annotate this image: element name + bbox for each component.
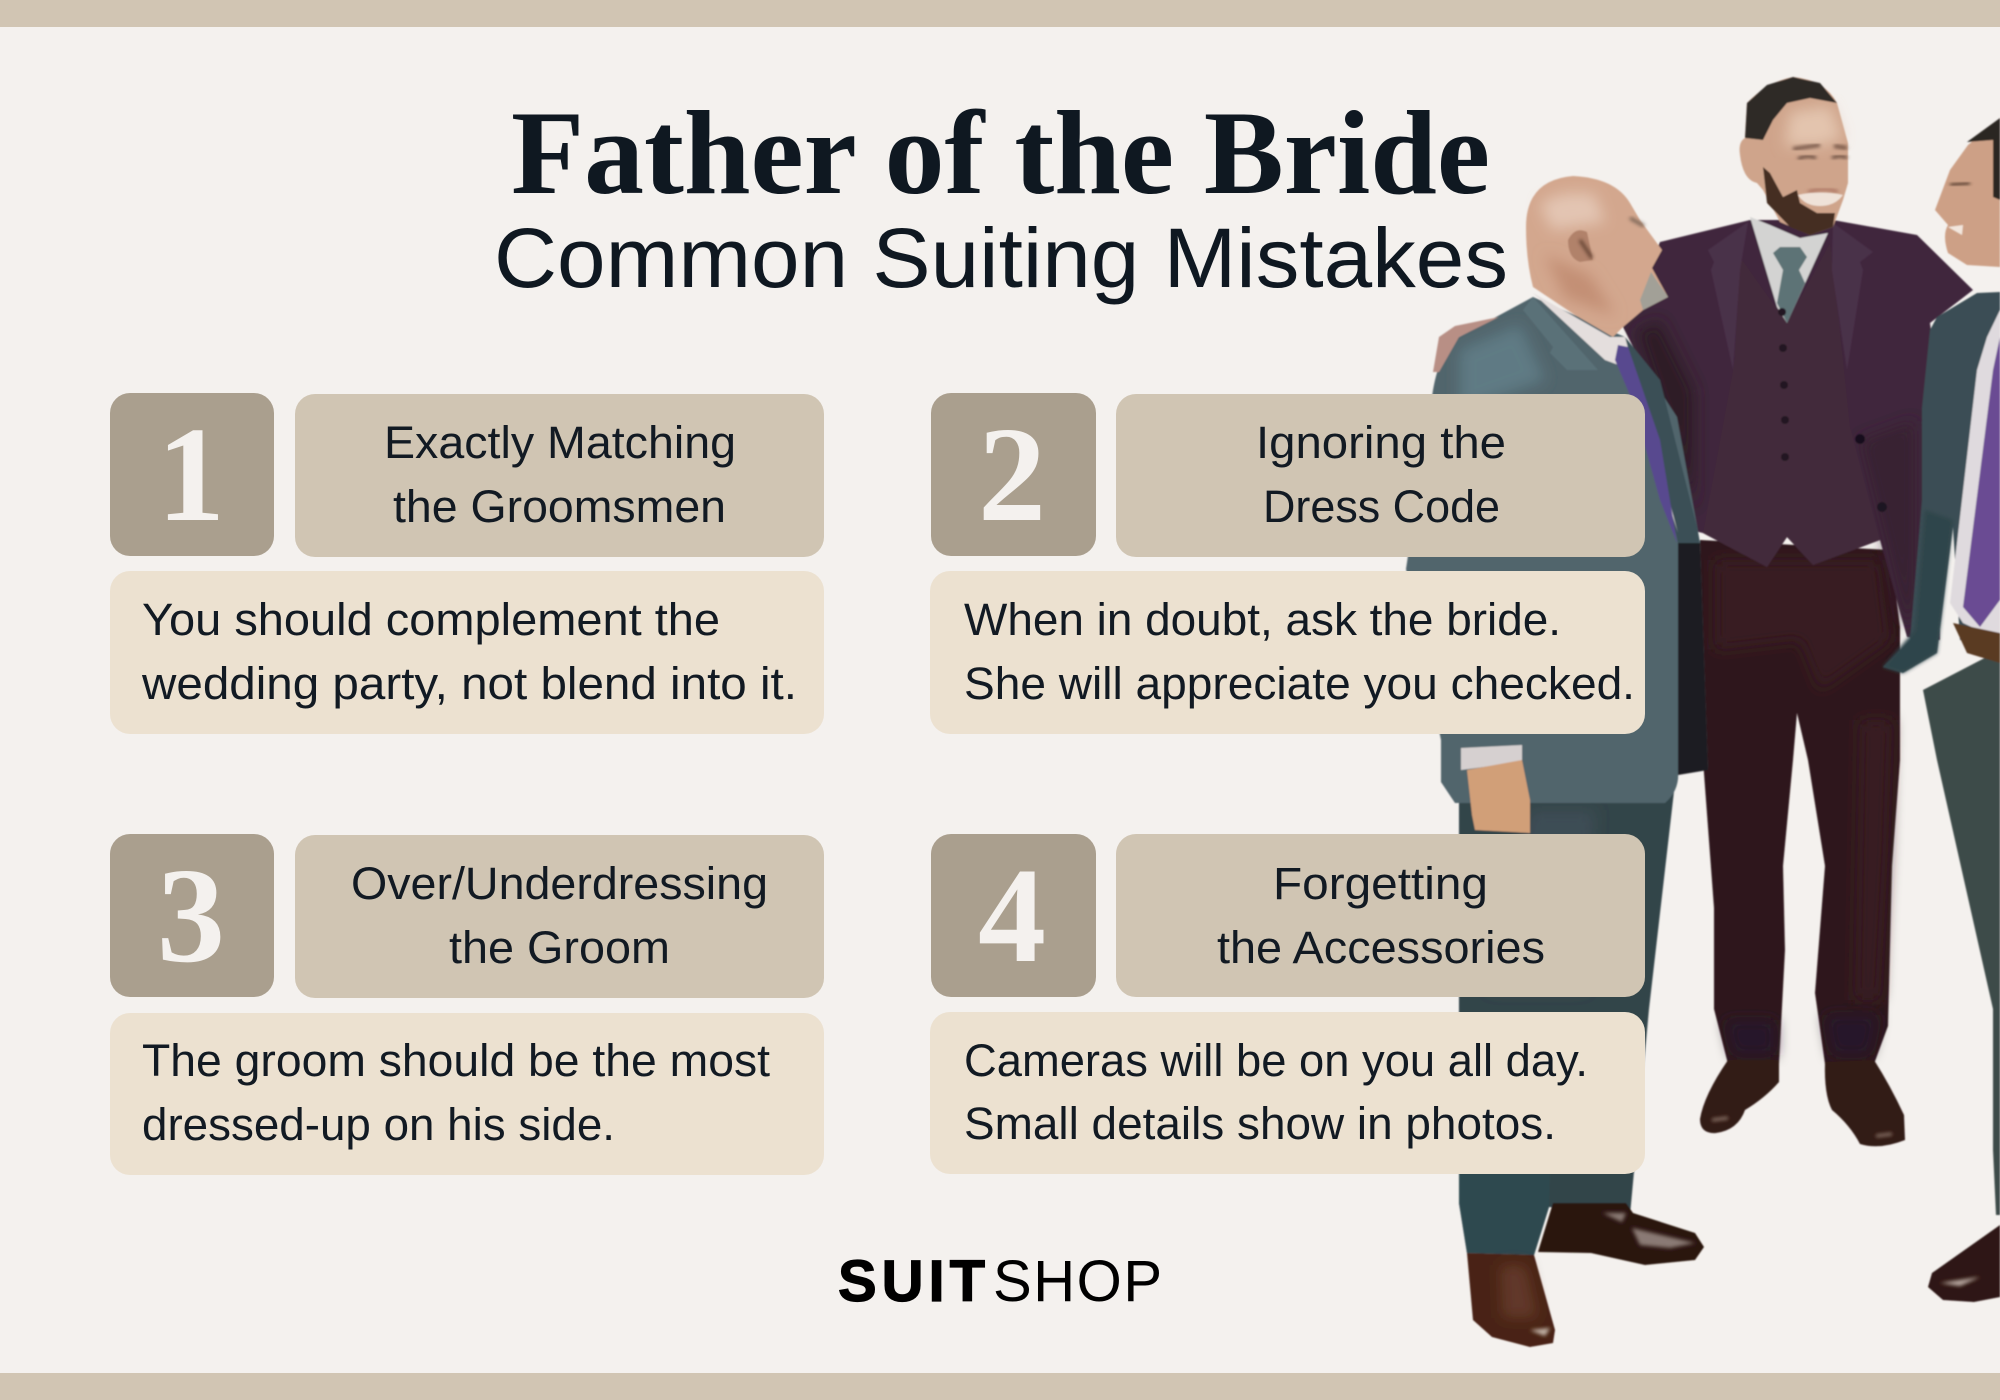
heading 3: the Groom bbox=[449, 922, 670, 973]
heading 4: Forgetting bbox=[1273, 858, 1488, 909]
number badge 1: 1 bbox=[157, 400, 225, 550]
heading 3 bbox=[295, 835, 824, 998]
man in purple suit bbox=[1623, 77, 1973, 1146]
number badge 2 bbox=[931, 393, 1096, 556]
photo: three men in suits bbox=[1406, 77, 2000, 1347]
description 3 bbox=[110, 1013, 824, 1175]
description 3: dressed-up on his side. bbox=[142, 1099, 615, 1150]
description 1: You should complement the bbox=[142, 594, 720, 645]
number badge 4 bbox=[931, 834, 1096, 997]
description 4 bbox=[930, 1012, 1645, 1174]
man in dark suit at right edge bbox=[1883, 118, 2000, 1302]
heading 2: Dress Code bbox=[1263, 481, 1500, 532]
panel 4: forgetting the accessories bbox=[930, 834, 1645, 1174]
heading 2: Ignoring the bbox=[1256, 417, 1506, 468]
heading 4 bbox=[1116, 834, 1645, 997]
number badge 1 bbox=[110, 393, 274, 556]
logo: SuitShop: SHOP bbox=[993, 1249, 1162, 1314]
description 2 bbox=[930, 571, 1645, 734]
number badge 4: 4 bbox=[978, 841, 1046, 991]
logo: SuitShop bbox=[838, 1249, 1162, 1314]
description 4: Small details show in photos. bbox=[964, 1098, 1556, 1149]
number badge 2: 2 bbox=[978, 400, 1046, 550]
top band bbox=[0, 0, 2000, 27]
number badge 3 bbox=[110, 834, 274, 997]
description 3: The groom should be the most bbox=[142, 1035, 771, 1086]
subtitle: Common Suiting Mistakes bbox=[494, 211, 1508, 305]
heading 3: Over/Underdressing bbox=[351, 858, 768, 909]
panel 3: over or underdressing bbox=[110, 834, 824, 1175]
number badge 3: 3 bbox=[157, 841, 225, 991]
description 1 bbox=[110, 571, 824, 734]
description 1: wedding party, not blend into it. bbox=[141, 658, 797, 709]
heading 2 bbox=[1116, 394, 1645, 557]
panel 2: ignoring the dress code bbox=[930, 393, 1645, 734]
heading 1: Exactly Matching bbox=[384, 417, 736, 468]
title: Father of the Bride bbox=[511, 86, 1490, 219]
description 4: Cameras will be on you all day. bbox=[964, 1035, 1588, 1086]
logo: SuitShop: SUIT bbox=[838, 1249, 985, 1314]
heading 1: the Groomsmen bbox=[393, 481, 726, 532]
heading 4: the Accessories bbox=[1217, 922, 1545, 973]
description 2: When in doubt, ask the bride. bbox=[964, 594, 1561, 645]
panel 1: exactly matching bbox=[110, 393, 824, 734]
man in grey suit (bald) bbox=[1406, 176, 1708, 1347]
heading 1 bbox=[295, 394, 824, 557]
description 2: She will appreciate you checked. bbox=[964, 658, 1635, 709]
bottom band bbox=[0, 1373, 2000, 1400]
